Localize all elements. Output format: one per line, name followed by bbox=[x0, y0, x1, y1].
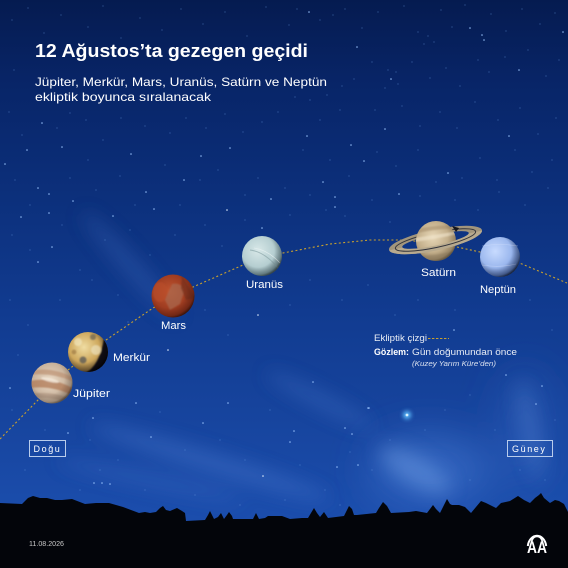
planet labels: Jüpiter bbox=[73, 388, 110, 400]
planet labels: Satürn bbox=[421, 267, 456, 279]
planet: Merkür bbox=[68, 332, 108, 372]
planet labels: Neptün bbox=[480, 284, 516, 296]
planet labels bbox=[73, 267, 516, 400]
direction box: Doğu bbox=[30, 440, 66, 456]
direction box: Güney bbox=[508, 440, 552, 456]
tree line silhouette and ground bbox=[0, 493, 568, 568]
planet: Jüpiter bbox=[30, 362, 74, 404]
planet: Mars bbox=[152, 274, 196, 318]
direction box: Güney: Güney bbox=[512, 444, 547, 454]
title: 12 Ağustos’ta gezegen geçidi bbox=[35, 40, 308, 61]
direction box: Doğu: Doğu bbox=[34, 444, 61, 454]
planet: Neptün bbox=[480, 237, 520, 277]
planet labels: Mars bbox=[161, 320, 187, 332]
legend: ecliptic line and observation note: Ekliptik çizgi bbox=[374, 333, 427, 343]
logo: Anadolu Ajansı: AA bbox=[527, 538, 547, 557]
legend: ecliptic line and observation note: (Kuzey Yarım Küre’den) bbox=[412, 359, 497, 368]
legend: ecliptic line and observation note: Gün doğumundan önce bbox=[412, 347, 517, 357]
legend: ecliptic line and observation note bbox=[374, 333, 517, 368]
subtitle bbox=[35, 75, 327, 104]
subtitle: ekliptik boyunca sıralanacak bbox=[35, 90, 212, 104]
planet: Satürn bbox=[387, 220, 484, 262]
planet labels: Merkür bbox=[113, 352, 150, 364]
subtitle: Jüpiter, Merkür, Mars, Uranüs, Satürn ve Neptün bbox=[35, 75, 327, 89]
planet: Uranüs bbox=[242, 236, 282, 276]
date: 11.08.2026 bbox=[29, 541, 64, 548]
planet labels: Uranüs bbox=[246, 279, 284, 291]
legend: ecliptic line and observation note: Gözlem: bbox=[374, 347, 409, 357]
ecliptic dotted line bbox=[0, 240, 567, 439]
